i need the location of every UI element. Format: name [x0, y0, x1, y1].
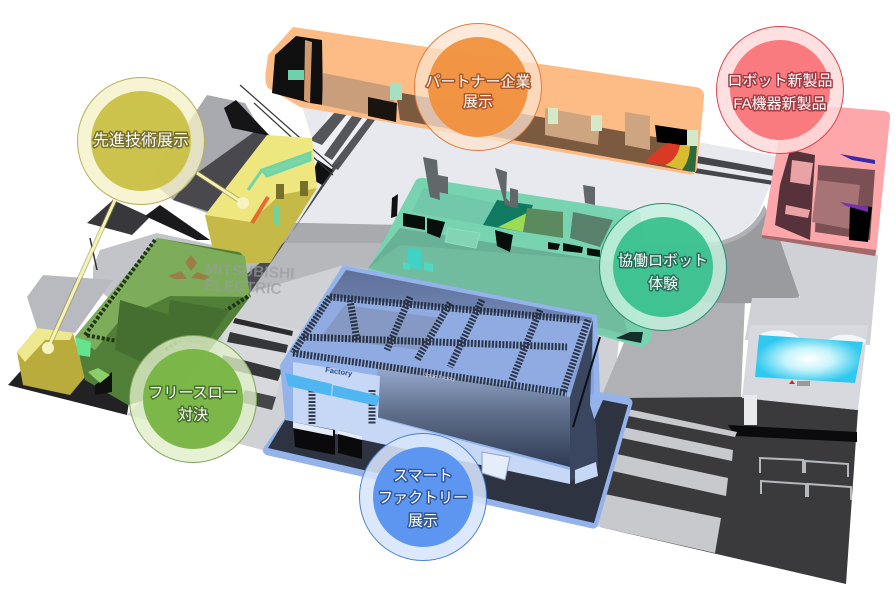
zone: smart factory blue: Smart Factory — [424, 372, 456, 383]
callout: collaborative robot: 体験 — [648, 276, 678, 292]
callout: advanced technology: 先進技術展示 — [93, 132, 189, 150]
floor — [127, 100, 782, 527]
callout: collaborative robot: 協働ロボット — [618, 252, 708, 270]
logo text: Mitsubishi Electric: ELECTRIC — [204, 277, 282, 298]
zone: robot and FA new products red — [762, 103, 890, 256]
callout: free throw: フリースロー — [148, 384, 238, 402]
zone: advanced technology yellow — [205, 135, 317, 263]
zone: free throw green — [75, 238, 250, 405]
floor stripes right — [600, 408, 737, 553]
connector lines — [42, 173, 249, 354]
callout: free throw: 対決 — [178, 406, 208, 424]
callout: free throw — [130, 336, 256, 462]
benches — [760, 458, 851, 500]
top stripes and rear walkways — [300, 110, 780, 186]
back wall display — [742, 325, 868, 425]
callout: smart factory: ファクトリー — [378, 490, 468, 506]
callout: partner exhibit: パートナー企業 — [425, 74, 531, 90]
logo text: Mitsubishi Electric: MITSUBISHI — [205, 261, 295, 283]
gray wash and back wall — [600, 205, 878, 420]
left floor stripes — [215, 315, 300, 410]
callout: robot and FA products: FA機器新製品 — [733, 96, 827, 112]
callout: collaborative robot — [600, 204, 726, 330]
callout: robot and FA products: ロボット新製品 — [727, 72, 833, 90]
zone: collaborative robot teal — [368, 157, 652, 347]
callout: smart factory: 展示 — [408, 512, 438, 530]
callout: smart factory: スマート — [393, 468, 453, 484]
factory sign: Factory — [325, 365, 354, 378]
zone: partner exhibit orange — [265, 27, 704, 174]
entrance screens — [285, 373, 380, 406]
callout: robot and FA products — [716, 26, 844, 154]
callout: partner exhibit: 展示 — [463, 94, 493, 110]
left gray platforms — [8, 85, 342, 415]
truss frame — [293, 297, 588, 425]
callout: partner exhibit — [414, 24, 542, 150]
callout: smart factory — [360, 434, 486, 560]
right dark floor — [600, 395, 858, 584]
logo text: Mitsubishi Electric — [204, 261, 295, 299]
zone: advanced technology yellow small — [17, 328, 85, 395]
callout: advanced technology — [78, 78, 204, 204]
zone: smart factory blue — [263, 265, 632, 529]
